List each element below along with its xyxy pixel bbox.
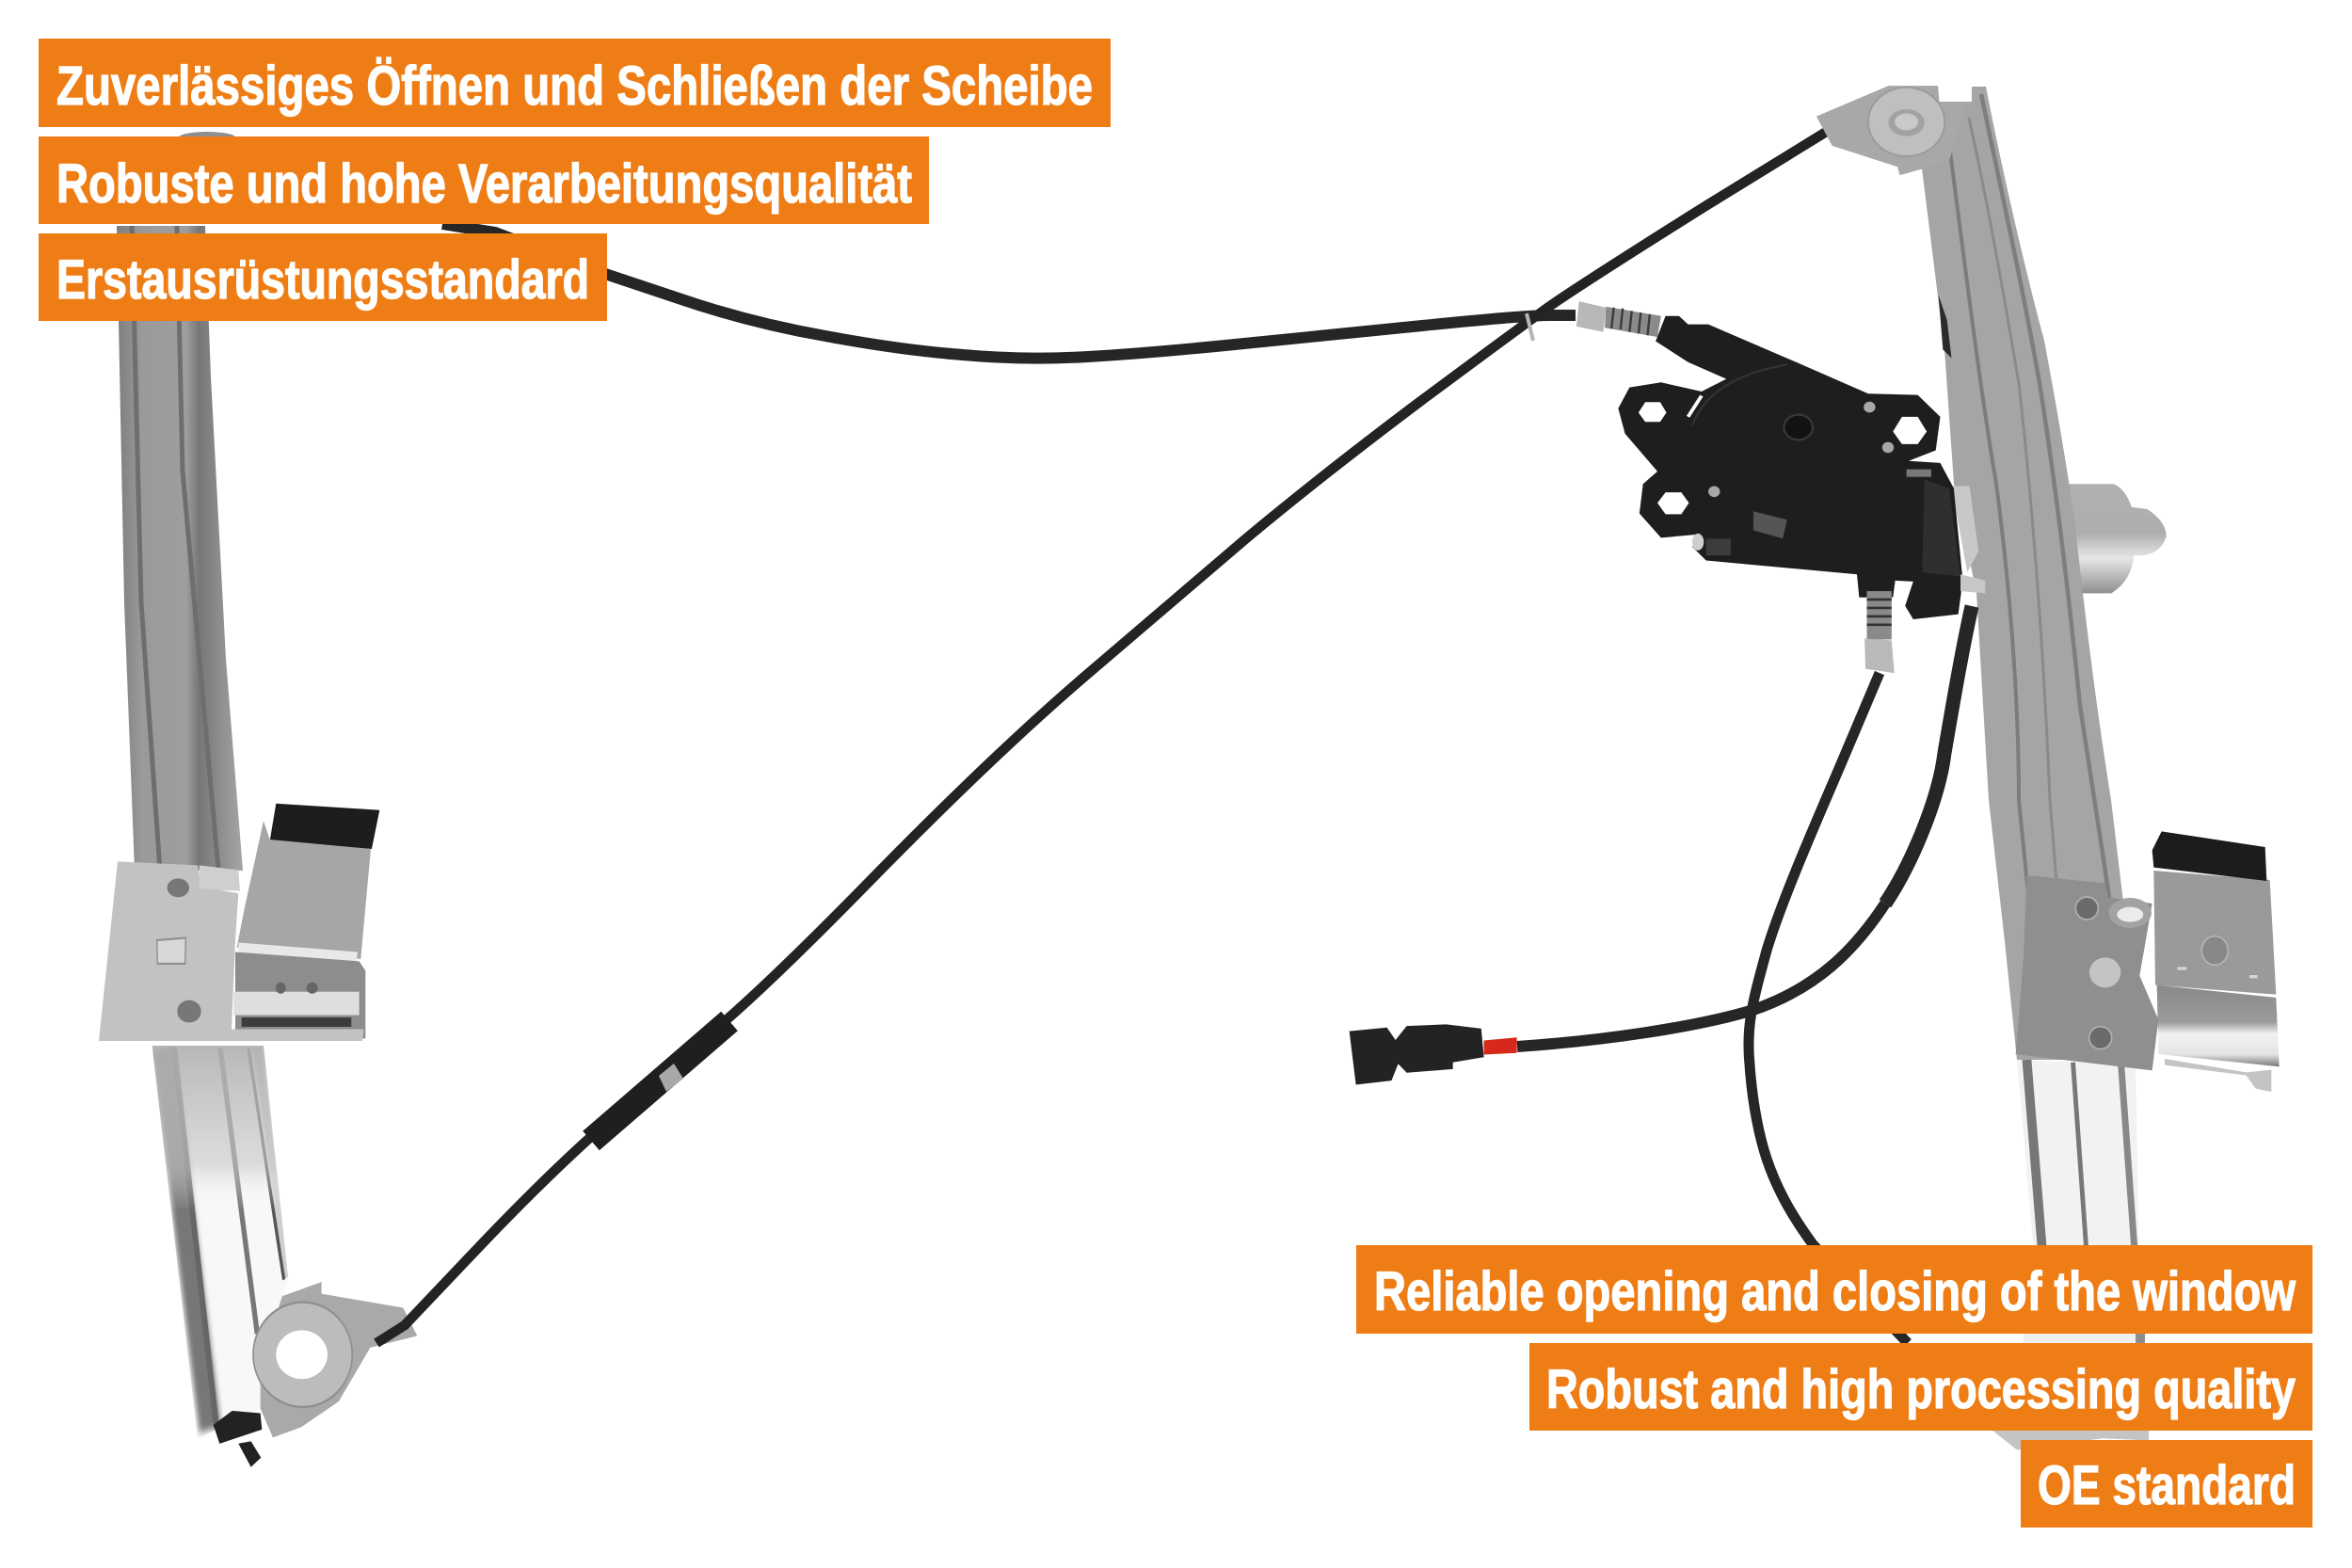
motor cover detail: [1692, 364, 1787, 425]
label: Reliable: [1356, 1245, 2312, 1334]
label: Zuverlässiges: Zuverlässiges Öffnen und Schließen der Scheibe: [56, 56, 1093, 117]
right guide rail: [1922, 87, 2167, 1449]
lower spacer: [1960, 574, 1985, 593]
German feature labels: [39, 39, 1111, 321]
label: OE standard: [2021, 1440, 2312, 1528]
black rubber pad: [270, 804, 379, 849]
clip upper bracket: [2153, 871, 2276, 995]
label: Robust: [1529, 1343, 2312, 1431]
rail lower section: [2017, 1060, 2139, 1247]
red wire segment: [1484, 1037, 1517, 1054]
pivot boss: [2109, 898, 2152, 928]
bowden cable to lower pulley: [1749, 673, 1908, 1343]
upper horizontal cable: [442, 224, 1576, 359]
rail upper section: [1922, 87, 2142, 1060]
English feature labels: [1356, 1245, 2312, 1528]
hexagon mounting holes: [1639, 402, 1667, 422]
right slider plate and glass clip: [2016, 831, 2280, 1092]
black rubber pad: [2152, 831, 2266, 881]
left pulley: [214, 1282, 417, 1467]
cable sleeve: [591, 1021, 729, 1141]
square hole: [157, 938, 185, 964]
cable ferrule and spring: [1576, 301, 1606, 332]
plate: [2016, 875, 2158, 1070]
electric wiring with connector: [1350, 606, 1972, 1084]
plug: [1350, 1024, 1484, 1084]
motor housing: [1618, 316, 1962, 619]
clip upper bracket: [237, 821, 371, 959]
main diagonal cable: [376, 131, 1828, 1343]
screws: [2075, 897, 2098, 920]
label: Robuste: [39, 136, 929, 224]
left slider plate and glass clip: [99, 804, 379, 1041]
screws: [168, 878, 189, 897]
clip lower bracket: [2157, 985, 2280, 1066]
lower spring and ferrule: [1867, 591, 1892, 639]
drive motor: [2057, 484, 2167, 593]
clip lower bracket: [235, 952, 365, 1038]
bottom end cap: [214, 1411, 262, 1444]
hub and screws: [1784, 415, 1813, 440]
label: Zuverlässiges: [39, 39, 1111, 127]
window motor drive unit: [1576, 301, 1985, 673]
label: Robuste: Robuste und hohe Verarbeitungsqualität: [56, 153, 912, 215]
top pulley: [1816, 86, 1967, 175]
plate: [99, 861, 364, 1041]
label: Erstausrüstungsstandard: Erstausrüstungsstandard: [56, 249, 589, 311]
wiring grommet: [1753, 511, 1787, 538]
cable clip: [1527, 313, 1533, 341]
label: Erstausrüstungsstandard: [39, 233, 607, 321]
rail upper section: [117, 226, 243, 871]
rail lower section: [152, 1046, 289, 1439]
left guide rail: [117, 132, 289, 1439]
